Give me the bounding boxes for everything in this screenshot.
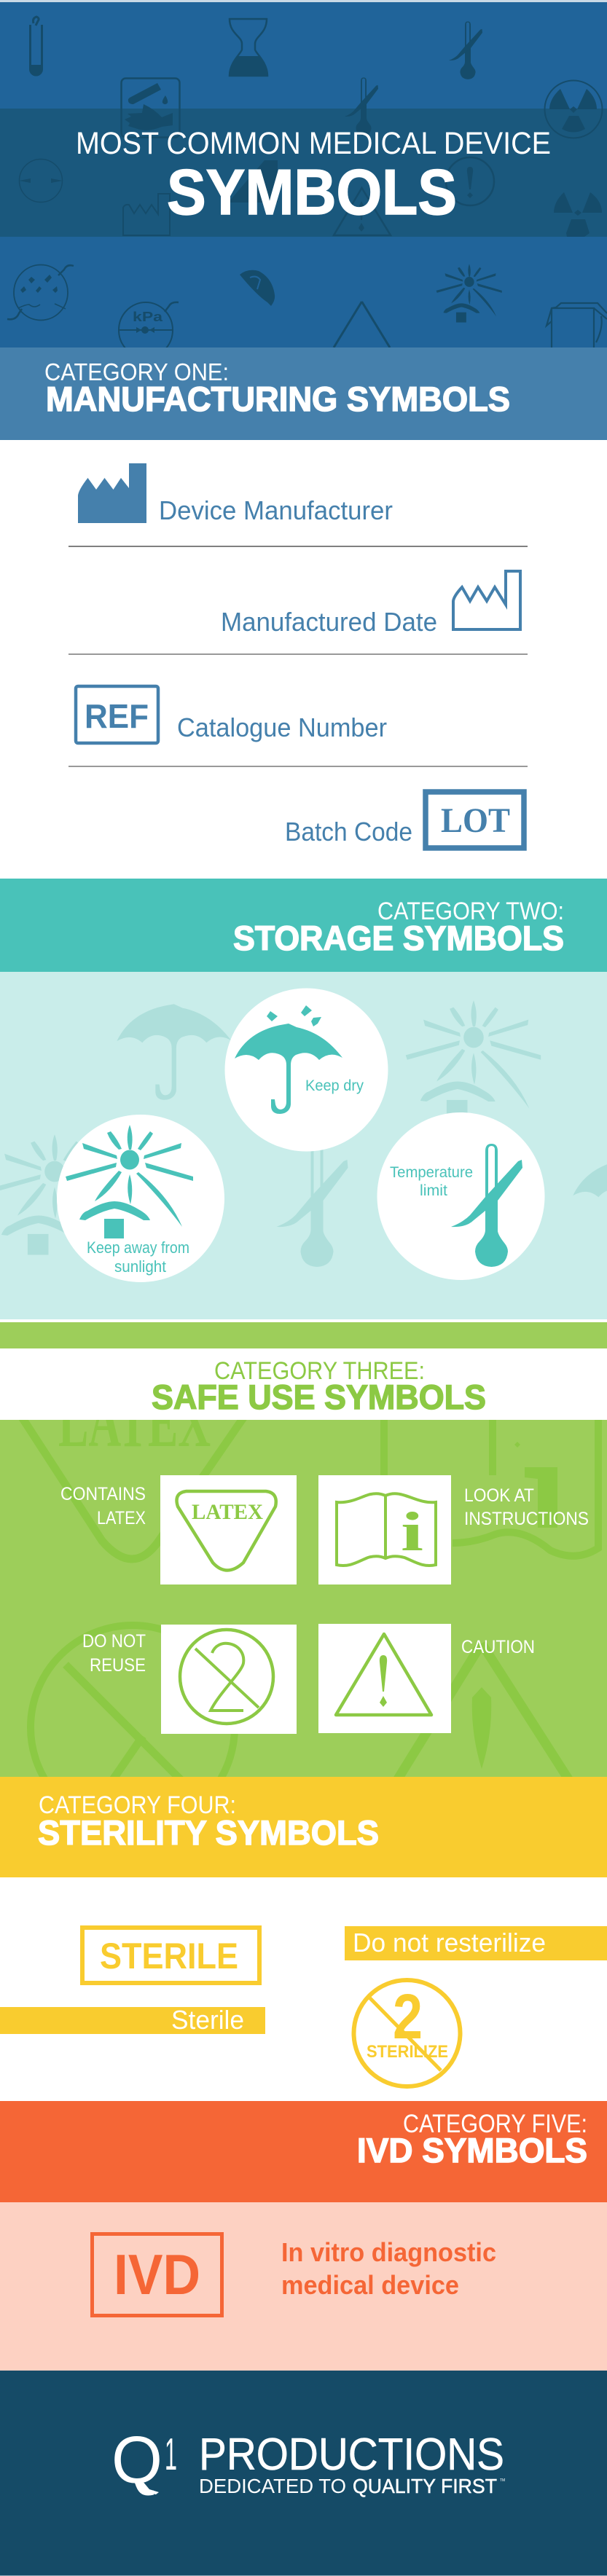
icon: latex bbox=[160, 1475, 297, 1585]
panel: storage symbols bbox=[0, 972, 607, 1319]
icon: device manufacturer bbox=[78, 463, 146, 523]
icon: sterile: STERILE bbox=[100, 1936, 238, 1976]
title band bbox=[0, 109, 607, 237]
text: contains latex bbox=[60, 1484, 146, 1528]
icon: instructions bbox=[318, 1475, 451, 1585]
heading: category one bbox=[0, 347, 607, 440]
icon: ivd bbox=[92, 2234, 222, 2315]
heading: category four bbox=[0, 1777, 607, 1877]
text: in vitro diagnostic medical device: In vitro diagnostic bbox=[281, 2237, 496, 2267]
icon: temperature limit bbox=[377, 1112, 545, 1280]
icon: lot: LOT bbox=[441, 801, 510, 840]
safe use background icons bbox=[19, 1420, 602, 1777]
icon: sterile bbox=[82, 1928, 259, 1983]
heading: category three bbox=[0, 1348, 607, 1420]
logo tagline: TM bbox=[500, 2478, 505, 2483]
panel: header bbox=[0, 0, 607, 358]
heading: category four: STERILITY SYMBOLS bbox=[38, 1813, 379, 1852]
label: sterile: Sterile bbox=[171, 2005, 244, 2035]
heading: category three: CATEGORY THREE: bbox=[214, 1357, 425, 1385]
label: sterile bbox=[0, 2005, 265, 2035]
icon: keep away from sunlight bbox=[57, 1115, 224, 1282]
storage background icons bbox=[0, 1000, 607, 1267]
logo wordmark: PRODUCTIONS bbox=[199, 2430, 504, 2480]
label: do not resterilize bbox=[345, 1926, 607, 1960]
icon: caution bbox=[318, 1624, 451, 1733]
panel: ivd symbols bbox=[0, 2202, 607, 2371]
text: do not reuse: DO NOT bbox=[82, 1631, 146, 1652]
text: manufactured date: Manufactured Date bbox=[221, 607, 437, 637]
icon: catalogue number bbox=[76, 686, 158, 743]
logo mark: Q bbox=[111, 2423, 162, 2497]
icon: keep away from sunlight: sunlight bbox=[114, 1257, 166, 1276]
logo tagline bbox=[199, 2475, 505, 2497]
logo tagline: DEDICATED TO bbox=[199, 2475, 346, 2497]
text: do not reuse: REUSE bbox=[90, 1655, 146, 1676]
icon: keep dry: Keep dry bbox=[305, 1077, 364, 1094]
icon: keep dry bbox=[224, 988, 388, 1151]
icon: do not resterilize bbox=[354, 1980, 461, 2086]
icon: instructions: i bbox=[401, 1501, 423, 1563]
icon: do not reuse bbox=[161, 1625, 297, 1734]
icon: latex: LATEX bbox=[192, 1500, 263, 1524]
icon: temperature limit: Temperature bbox=[390, 1164, 473, 1181]
text: caution: CAUTION bbox=[461, 1637, 535, 1657]
heading: category three: SAFE USE SYMBOLS bbox=[152, 1378, 486, 1416]
panel: sterility symbols bbox=[0, 1877, 607, 2101]
safe use background icons: LATEX bbox=[58, 1381, 211, 1462]
heading: category one: MANUFACTURING SYMBOLS bbox=[46, 380, 510, 418]
label: do not resterilize: Do not resterilize bbox=[353, 1928, 546, 1957]
heading: category five bbox=[0, 2101, 607, 2202]
icon: manufactured date bbox=[453, 571, 520, 629]
text: in vitro diagnostic medical device: medical device bbox=[281, 2270, 459, 2300]
text: in vitro diagnostic medical device bbox=[281, 2237, 496, 2300]
footer: logo bbox=[0, 2371, 607, 2576]
title main word: SYMBOLS bbox=[167, 156, 457, 228]
heading: category two: STORAGE SYMBOLS bbox=[233, 919, 564, 957]
icon: do not resterilize: STERILIZE bbox=[367, 2042, 448, 2062]
heading: category two bbox=[0, 879, 607, 972]
panel: safe use symbols bbox=[0, 1322, 607, 1777]
text: device manufacturer: Device Manufacturer bbox=[159, 495, 393, 525]
panel: manufacturing symbols bbox=[0, 440, 607, 879]
text: batch code: Batch Code bbox=[285, 817, 412, 847]
heading: category two: CATEGORY TWO: bbox=[377, 898, 564, 925]
logo tagline: QUALITY FIRST bbox=[353, 2475, 497, 2497]
header background icons bbox=[7, 17, 607, 358]
text: look at instructions: LOOK AT bbox=[464, 1485, 534, 1506]
heading: category five: IVD SYMBOLS bbox=[357, 2131, 587, 2169]
icon: catalogue number: REF bbox=[85, 697, 149, 735]
text: catalogue number: Catalogue Number bbox=[177, 712, 387, 742]
heading: category one: CATEGORY ONE: bbox=[44, 358, 229, 385]
text: contains latex: LATEX bbox=[97, 1508, 146, 1528]
header icon text: kPa bbox=[133, 310, 163, 324]
text: do not reuse bbox=[82, 1631, 146, 1676]
title line: MOST COMMON MEDICAL DEVICE bbox=[76, 126, 551, 161]
text: look at instructions: INSTRUCTIONS bbox=[464, 1509, 589, 1529]
icon: lot bbox=[426, 792, 524, 848]
heading: category four: CATEGORY FOUR: bbox=[39, 1791, 236, 1819]
icon: do not resterilize: 2 bbox=[393, 1982, 423, 2052]
text: look at instructions bbox=[464, 1485, 589, 1529]
icon: temperature limit: limit bbox=[420, 1182, 447, 1199]
icon: keep away from sunlight: Keep away from bbox=[87, 1238, 189, 1257]
icon: ivd: IVD bbox=[114, 2242, 200, 2306]
footer: logo: 1 bbox=[165, 2430, 177, 2480]
text: contains latex: CONTAINS bbox=[60, 1484, 146, 1504]
